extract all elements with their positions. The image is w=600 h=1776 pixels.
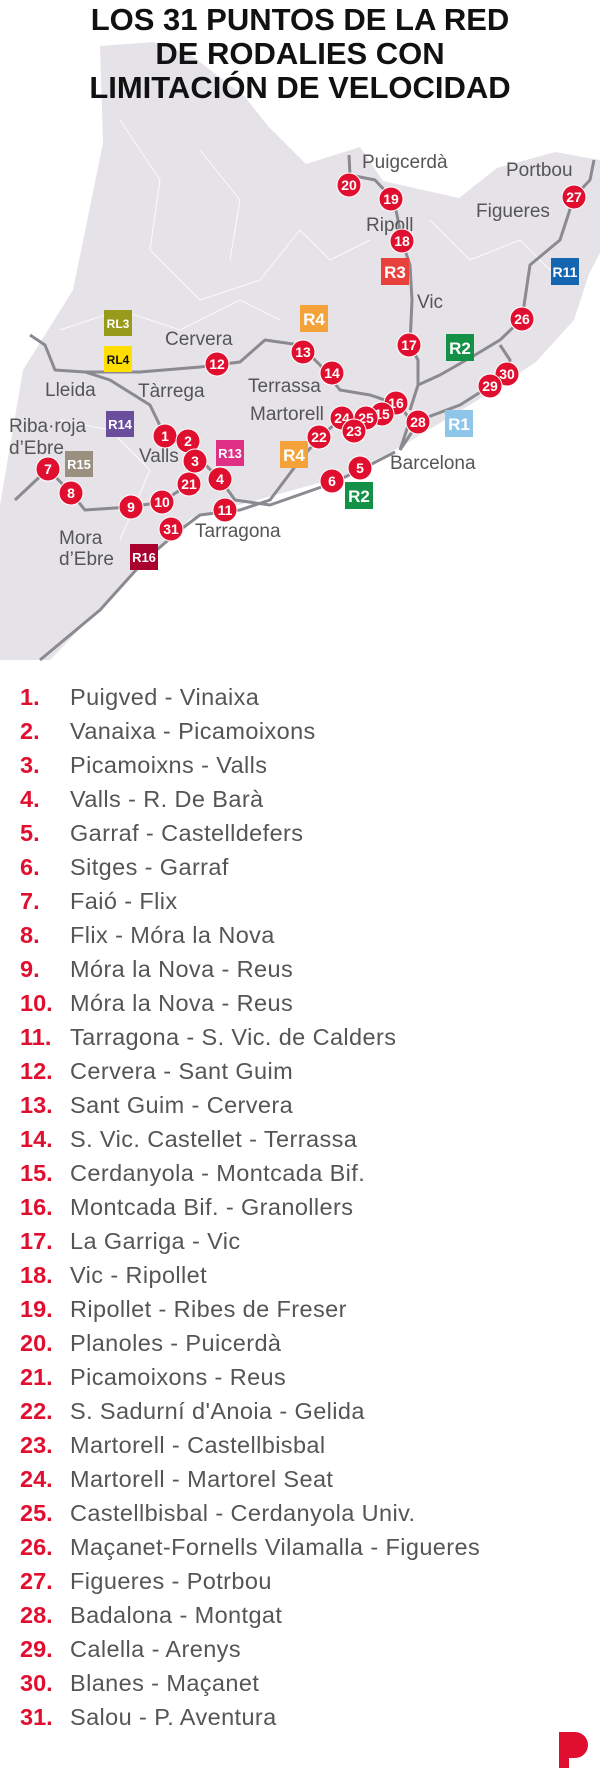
list of points: Móra la Nova - Reus <box>70 990 293 1016</box>
markers: 6 <box>328 473 336 489</box>
list of points: Salou - P. Aventura <box>70 1704 277 1730</box>
list of points: Tarragona - S. Vic. de Calders <box>70 1024 396 1050</box>
list of points: 10. <box>20 990 53 1016</box>
list of points: 18. <box>20 1262 53 1288</box>
markers: 15 <box>374 406 390 422</box>
list of points: Blanes - Maçanet <box>70 1670 259 1696</box>
rail lines <box>15 155 594 660</box>
markers: 27 <box>566 189 582 205</box>
markers <box>36 173 586 541</box>
list of points: 1. <box>20 684 40 710</box>
city labels: d’Ebre <box>9 438 64 459</box>
list of points: Ripollet - Ribes de Freser <box>70 1296 347 1322</box>
city labels: Riba·roja <box>9 416 87 437</box>
list of points: 7. <box>20 888 40 914</box>
list of points: 12. <box>20 1058 53 1084</box>
list of points: 29. <box>20 1636 53 1662</box>
list of points: S. Vic. Castellet - Terrassa <box>70 1126 357 1152</box>
markers: 24 <box>334 410 350 426</box>
markers: 30 <box>499 366 515 382</box>
markers: 20 <box>341 177 357 193</box>
list of points: 4. <box>20 786 40 812</box>
list of points: Calella - Arenys <box>70 1636 241 1662</box>
markers: 9 <box>127 499 135 515</box>
markers: 23 <box>346 423 362 439</box>
city labels: Lleida <box>45 380 96 401</box>
markers: 28 <box>410 414 426 430</box>
list of points: Figueres - Potrbou <box>70 1568 272 1594</box>
line badges: R11 <box>553 264 578 280</box>
list of points: Garraf - Castelldefers <box>70 820 303 846</box>
markers: 8 <box>67 485 75 501</box>
markers: 17 <box>401 337 417 353</box>
list of points: Cerdanyola - Montcada Bif. <box>70 1160 365 1186</box>
city labels: Portbou <box>506 160 573 181</box>
list of points <box>20 684 480 1730</box>
city labels: Martorell <box>250 404 324 425</box>
markers: 18 <box>394 233 410 249</box>
city labels: Tàrrega <box>138 381 205 402</box>
list of points: 21. <box>20 1364 53 1390</box>
list of points: Badalona - Montgat <box>70 1602 282 1628</box>
list of points: S. Sadurní d'Anoia - Gelida <box>70 1398 365 1424</box>
list of points: Sant Guim - Cervera <box>70 1092 293 1118</box>
markers: 21 <box>181 476 197 492</box>
list of points: Picamoixns - Valls <box>70 752 267 778</box>
list of points: 2. <box>20 718 40 744</box>
city labels: Figueres <box>476 201 550 222</box>
list of points: Flix - Móra la Nova <box>70 922 275 948</box>
line badges: RL3 <box>107 317 130 331</box>
city labels: Cervera <box>165 329 233 350</box>
city labels: Valls <box>139 446 179 467</box>
list of points: 13. <box>20 1092 53 1118</box>
list of points: 28. <box>20 1602 53 1628</box>
list of points: 14. <box>20 1126 53 1152</box>
line badges: R2 <box>348 487 370 506</box>
list of points: Martorell - Castellbisbal <box>70 1432 326 1458</box>
markers: 7 <box>44 461 52 477</box>
city labels: Puigcerdà <box>362 152 448 173</box>
list of points: Vic - Ripollet <box>70 1262 207 1288</box>
list of points: 15. <box>20 1160 53 1186</box>
markers: 5 <box>356 460 364 476</box>
list of points: Castellbisbal - Cerdanyola Univ. <box>70 1500 415 1526</box>
line badges: RL4 <box>107 353 130 367</box>
list of points: Valls - R. De Barà <box>70 786 264 812</box>
city labels: Ripoll <box>366 215 414 236</box>
markers: 10 <box>154 494 170 510</box>
city labels <box>9 152 573 570</box>
list of points: 6. <box>20 854 40 880</box>
line badges: R3 <box>384 263 406 282</box>
list of points: 16. <box>20 1194 53 1220</box>
list of points: 22. <box>20 1398 53 1424</box>
line badges: R4 <box>283 446 305 465</box>
title: LOS 31 PUNTOS DE LA RED <box>91 2 509 37</box>
markers: 19 <box>383 191 399 207</box>
city labels: Tarragona <box>195 521 281 542</box>
markers: 29 <box>482 378 498 394</box>
list of points: Picamoixons - Reus <box>70 1364 286 1390</box>
markers: 31 <box>163 521 179 537</box>
markers: 4 <box>216 471 224 487</box>
list of points: Faió - Flix <box>70 888 178 914</box>
map <box>0 42 600 661</box>
line badges: R16 <box>132 550 156 565</box>
markers: 3 <box>191 453 199 469</box>
markers: 25 <box>358 410 374 426</box>
list of points: 17. <box>20 1228 53 1254</box>
list of points: Maçanet-Fornells Vilamalla - Figueres <box>70 1534 480 1560</box>
list of points: 9. <box>20 956 40 982</box>
list of points: 3. <box>20 752 40 778</box>
markers: 16 <box>388 395 404 411</box>
line badges: R15 <box>67 457 91 472</box>
list of points: Martorell - Martorel Seat <box>70 1466 333 1492</box>
list of points: 25. <box>20 1500 53 1526</box>
list of points: 19. <box>20 1296 53 1322</box>
list of points: Puigved - Vinaixa <box>70 684 259 710</box>
city labels: Terrassa <box>248 376 321 397</box>
title <box>89 2 511 105</box>
markers: 1 <box>161 428 169 444</box>
list of points: 30. <box>20 1670 53 1696</box>
list of points: 5. <box>20 820 40 846</box>
markers: 14 <box>324 365 340 381</box>
list of points: 8. <box>20 922 40 948</box>
city labels: Vic <box>417 292 443 313</box>
list of points: Vanaixa - Picamoixons <box>70 718 316 744</box>
list of points: 11. <box>20 1024 51 1050</box>
list of points: La Garriga - Vic <box>70 1228 241 1254</box>
markers: 12 <box>209 356 225 372</box>
markers: 2 <box>184 433 192 449</box>
list of points: Sitges - Garraf <box>70 854 229 880</box>
list of points: 24. <box>20 1466 53 1492</box>
list of points: Planoles - Puicerdà <box>70 1330 281 1356</box>
list of points: 23. <box>20 1432 53 1458</box>
list of points: 20. <box>20 1330 53 1356</box>
line badges <box>65 258 579 570</box>
line badges: R13 <box>218 446 242 461</box>
markers: 22 <box>311 429 327 445</box>
line badges: R2 <box>449 339 471 358</box>
city labels: d’Ebre <box>59 549 114 570</box>
list of points: Montcada Bif. - Granollers <box>70 1194 353 1220</box>
list of points: 26. <box>20 1534 53 1560</box>
land: Catalonia <box>0 42 600 660</box>
markers: 13 <box>295 344 311 360</box>
line badges: R14 <box>108 417 133 432</box>
title: DE RODALIES CON <box>155 36 445 71</box>
list of points: Móra la Nova - Reus <box>70 956 293 982</box>
list of points: Cervera - Sant Guim <box>70 1058 293 1084</box>
city labels: Barcelona <box>390 453 476 474</box>
line badges: R1 <box>448 415 470 434</box>
city labels: Mora <box>59 528 103 549</box>
title: LIMITACIÓN DE VELOCIDAD <box>89 70 511 105</box>
logo <box>559 1732 588 1768</box>
list of points: 27. <box>20 1568 53 1594</box>
list of points: 31. <box>20 1704 53 1730</box>
markers: 11 <box>218 502 233 518</box>
line badges: R4 <box>303 310 325 329</box>
markers: 26 <box>514 311 530 327</box>
